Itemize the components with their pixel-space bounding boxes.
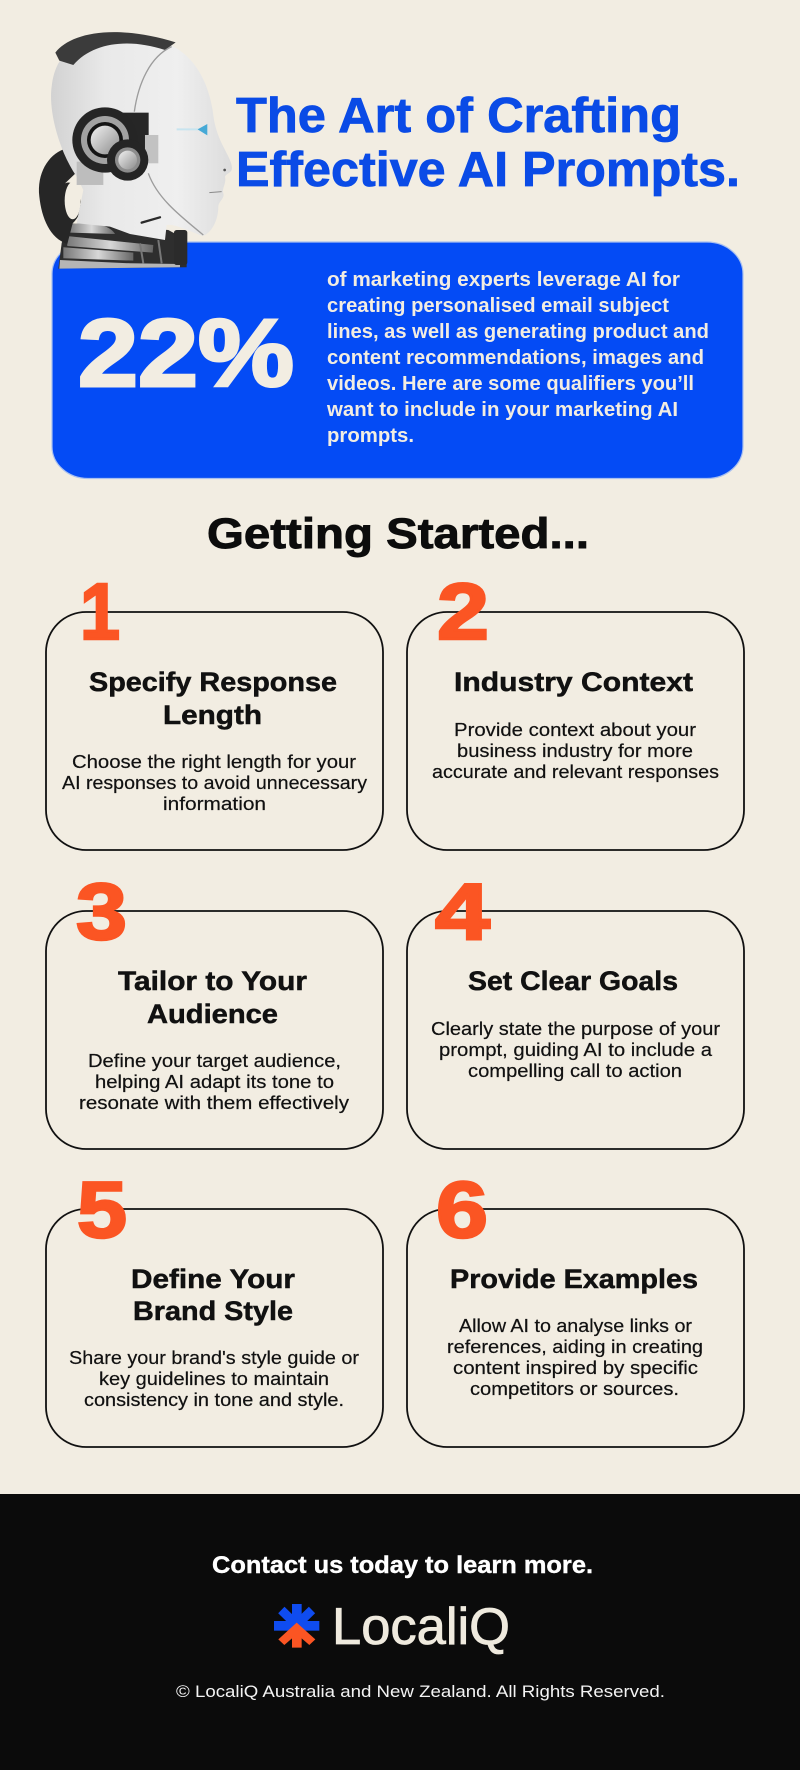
logo wordmark: LocaliQ <box>332 1598 510 1656</box>
number 6: 6 <box>436 1165 488 1254</box>
card body <box>69 1348 359 1410</box>
card body <box>447 1316 703 1399</box>
panel: card 4 <box>407 867 744 1149</box>
card body: references, aiding in creating <box>447 1337 703 1357</box>
brackets <box>77 113 158 185</box>
statistic description: want to include in your marketing AI <box>326 399 678 421</box>
statistic description: creating personalised email subject <box>327 295 669 317</box>
black crest <box>55 32 176 65</box>
card body: helping AI adapt its tone to <box>95 1072 334 1092</box>
title <box>236 89 740 197</box>
icon: robot head in profile <box>39 32 232 269</box>
neck rings <box>58 223 187 269</box>
panel: card 1 <box>46 567 383 850</box>
ear disc small <box>107 139 148 181</box>
number 2: 2 <box>437 567 489 656</box>
card heading: Industry Context <box>454 667 693 697</box>
eye glow <box>177 124 207 135</box>
statistic description: of marketing experts leverage AI for <box>327 269 680 291</box>
card heading: Define Your <box>131 1264 296 1294</box>
back strap <box>39 149 81 244</box>
card body: Allow AI to analyse links or <box>459 1316 692 1336</box>
card body: resonate with them effectively <box>79 1093 349 1113</box>
head shell <box>51 39 232 240</box>
strap opening <box>65 182 81 219</box>
panel: card 5 <box>46 1165 383 1447</box>
silver seam <box>134 47 203 235</box>
card heading: Specify Response <box>89 667 337 697</box>
card heading: Provide Examples <box>450 1264 698 1294</box>
number 4: 4 <box>435 867 491 956</box>
ear disc large <box>72 107 138 173</box>
card body: Define your target audience, <box>88 1051 341 1071</box>
number 5: 5 <box>77 1165 127 1254</box>
title: Effective AI Prompts. <box>236 143 740 197</box>
nose and mouth <box>209 169 226 193</box>
card body <box>62 752 367 814</box>
card heading <box>89 667 337 730</box>
statistic description: prompts. <box>327 425 414 447</box>
copyright: © LocaliQ Australia and New Zealand. All Rights Reserved. <box>176 1682 665 1701</box>
card heading: Set Clear Goals <box>468 966 678 996</box>
card body: Clearly state the purpose of your <box>431 1019 720 1039</box>
panel: 22% statistic <box>52 242 743 478</box>
card body: information <box>163 794 266 814</box>
card body: competitors or sources. <box>470 1379 679 1399</box>
card body <box>431 1019 720 1081</box>
card heading <box>131 1264 296 1326</box>
call to action: Contact us today to learn more. <box>212 1552 593 1579</box>
card body: accurate and relevant responses <box>432 762 719 782</box>
card body <box>432 720 719 782</box>
card body: Share your brand's style guide or <box>69 1348 359 1368</box>
number 1: 1 <box>80 567 120 656</box>
card heading: Audience <box>147 999 278 1029</box>
statistic description: lines, as well as generating product and <box>327 321 709 343</box>
panel: card 3 <box>46 867 383 1149</box>
statistic description: content recommendations, images and <box>327 347 704 369</box>
card body <box>79 1051 349 1113</box>
card body: prompt, guiding AI to include a <box>439 1040 713 1060</box>
card body: AI responses to avoid unnecessary <box>62 773 367 793</box>
statistic: 22%: 22% <box>78 300 294 407</box>
card body: Provide context about your <box>454 720 696 740</box>
card body: business industry for more <box>457 741 693 761</box>
card body: consistency in tone and style. <box>84 1390 344 1410</box>
statistic description <box>326 269 709 447</box>
neck mark <box>142 217 160 223</box>
number 3: 3 <box>76 867 127 956</box>
title: The Art of Crafting <box>236 89 681 143</box>
icon: LocaliQ logo mark <box>274 1604 319 1648</box>
card heading: Tailor to Your <box>118 966 308 996</box>
heading: Getting Started: Getting Started... <box>207 510 589 558</box>
card body: key guidelines to maintain <box>99 1369 329 1389</box>
statistic description: videos. Here are some qualifiers you’ll <box>327 373 694 395</box>
card body: content inspired by specific <box>453 1358 698 1378</box>
card heading <box>118 966 308 1029</box>
card heading: Length <box>163 700 262 730</box>
panel: footer <box>0 1494 800 1770</box>
card body: compelling call to action <box>468 1061 682 1081</box>
panel: card 6 <box>407 1165 744 1447</box>
panel: card 2 <box>407 567 744 850</box>
card heading: Brand Style <box>133 1296 293 1326</box>
card body: Choose the right length for your <box>72 752 356 772</box>
